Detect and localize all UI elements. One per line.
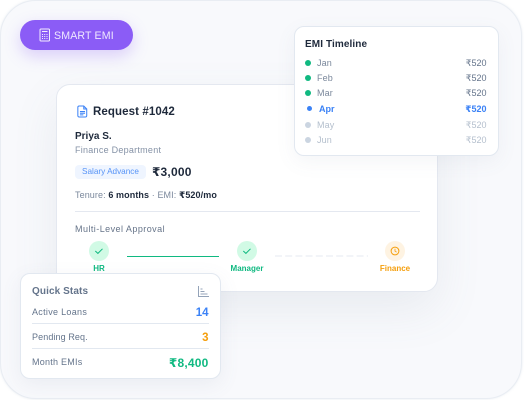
stat: pending requests: [32, 332, 208, 344]
row: feb: ₹520: [466, 73, 486, 83]
icon: document: [77, 106, 88, 118]
stat: month emis: ₹8,400: [169, 356, 208, 370]
row: mar: [305, 88, 486, 98]
row: feb: [305, 73, 486, 83]
stat: month emis: Month EMIs: [32, 357, 83, 367]
stat: active loans: Active Loans: [32, 307, 87, 317]
icon: manager check: [237, 241, 257, 261]
row: mar: ₹520: [466, 88, 486, 98]
approval step: finance: [380, 241, 410, 273]
divider: [32, 323, 209, 324]
stat: active loans: 14: [196, 307, 208, 319]
row: apr: [307, 104, 486, 114]
row: jun: [305, 135, 486, 145]
row: jun: ₹520: [466, 135, 486, 145]
stat: month emis: [32, 356, 208, 370]
row: apr: ₹520: [465, 104, 486, 114]
row: jan: [305, 58, 486, 68]
row: jan: Jan: [317, 58, 332, 68]
row: mar: Mar: [317, 88, 333, 98]
row: may: [305, 120, 486, 130]
panel: quick stats: [20, 273, 221, 379]
heading: emi timeline: EMI Timeline: [305, 39, 367, 50]
approval step: manager: [231, 241, 264, 273]
row: may: May: [317, 120, 334, 130]
approval heading: Multi-Level Approval: [75, 224, 165, 234]
finance label: Finance: [380, 264, 410, 273]
heading: quick stats: Quick Stats: [32, 286, 88, 297]
stat: active loans: [32, 307, 208, 319]
icon: bar chart: [198, 286, 209, 297]
row: may: ₹520: [466, 120, 486, 130]
divider: [75, 211, 420, 212]
amount: ₹3,000: [152, 165, 192, 179]
icon: calculator: [40, 28, 50, 42]
panel: emi timeline: [294, 26, 499, 156]
divider: [32, 348, 209, 349]
icon: hr check: [89, 241, 109, 261]
connector: completed: [127, 256, 219, 257]
row: apr: Apr: [319, 104, 334, 114]
panel: request card: [56, 84, 438, 292]
manager label: Manager: [231, 264, 263, 273]
stat: pending requests: Pending Req.: [32, 332, 88, 342]
icon: finance clock: [385, 241, 405, 261]
row: feb: Feb: [317, 73, 333, 83]
row: jan: ₹520: [466, 58, 486, 68]
badge label: SMART EMI: [54, 30, 114, 42]
stat: pending requests: 3: [202, 332, 208, 344]
tenure and emi: Tenure: 6 months · EMI: ₹520/mo: [75, 190, 217, 200]
department: Finance Department: [75, 145, 161, 155]
connector: pending: [275, 256, 368, 257]
heading: request number: Request #1042: [93, 106, 175, 118]
applicant name: Priya S.: [75, 131, 112, 142]
badge: smart emi: [20, 20, 133, 50]
tag: salary advance: [75, 165, 146, 179]
hr label: HR: [93, 264, 105, 273]
approval step: hr: [89, 241, 109, 273]
row: jun: Jun: [317, 135, 332, 145]
tag: salary advance: Salary Advance: [82, 167, 139, 176]
